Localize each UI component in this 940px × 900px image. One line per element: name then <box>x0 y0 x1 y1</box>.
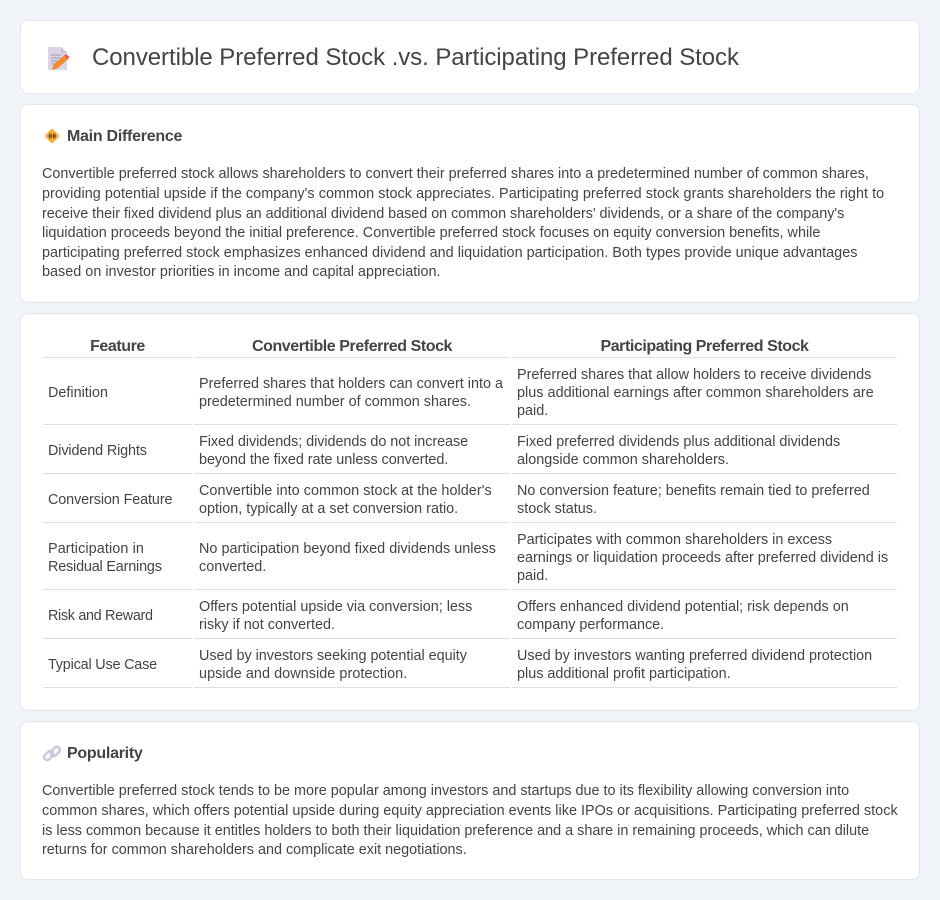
row: participation in residual earnings: earnings or liquidation proceeds after preferred dividend is <box>517 550 888 566</box>
row: conversion feature: No conversion feature; benefits remain tied to preferred <box>517 483 870 499</box>
row: dividend rights: alongside common shareholders. <box>517 452 729 468</box>
row: conversion feature: stock status. <box>517 501 597 517</box>
row: typical use case: plus additional profit participation. <box>517 666 731 682</box>
text block: popularity: common shares, which offers potential upside during equity appreciation events like IPOs or acquisitions. Participating preferred stock <box>42 803 898 819</box>
table header: participating preferred stock: Participating Preferred Stock <box>600 338 809 355</box>
text block: main difference: based on investor priorities in income and capital appreciation. <box>42 264 441 280</box>
row: conversion feature: Convertible into common stock at the holder's <box>199 483 492 499</box>
icon: document with pencil <box>48 47 70 70</box>
row: definition: Preferred shares that allow holders to receive dividends <box>517 367 871 383</box>
text block: popularity: returns for common shareholders and complicate exit negotiations. <box>42 842 467 858</box>
row: participation in residual earnings: No participation beyond fixed dividends unless <box>199 541 496 557</box>
row: dividend rights <box>48 434 840 468</box>
row: participation in residual earnings: Participation in <box>48 541 144 557</box>
text block: popularity: Convertible preferred stock tends to be more popular among investors and startups due to its flexibility allowing conversion into <box>42 783 849 799</box>
row: definition: paid. <box>517 403 548 419</box>
row: risk and reward: risky if not converted. <box>199 617 335 633</box>
row: dividend rights: Fixed preferred dividends plus additional dividends <box>517 434 840 450</box>
title: Convertible Preferred Stock .vs. Participating Preferred Stock <box>92 44 739 71</box>
row: definition <box>48 367 874 419</box>
text block: main difference: liquidation proceeds beyond the initial preference. Convertible preferred stock focuses on equity conversion benefits, while <box>42 225 820 241</box>
row: definition: Preferred shares that holders can convert into a <box>199 376 503 392</box>
icon: chain link <box>43 746 61 762</box>
panel: main difference <box>20 104 920 303</box>
row: typical use case: Used by investors seeking potential equity <box>199 648 467 664</box>
text block: main difference: receive their fixed dividend plus an additional dividend based on common shareholders' dividends, or a share of the company's <box>42 206 844 222</box>
row: conversion feature <box>48 483 870 517</box>
table header: feature: Feature <box>90 338 145 355</box>
heading: popularity: Popularity <box>67 745 143 762</box>
row: participation in residual earnings: Residual Earnings <box>48 559 162 575</box>
row: participation in residual earnings: paid. <box>517 568 548 584</box>
text block: popularity: is less common because it entitles holders to both their liquidation preference and a share in remaining proceeds, which can dilute <box>42 823 869 839</box>
table header: convertible preferred stock: Convertible Preferred Stock <box>252 338 452 355</box>
panel: comparison table <box>20 313 920 711</box>
row: conversion feature: option, typically at a set conversion ratio. <box>199 501 458 517</box>
row: risk and reward: Offers potential upside via conversion; less <box>199 599 472 615</box>
heading: main difference: Main Difference <box>67 128 182 145</box>
row: risk and reward: company performance. <box>517 617 664 633</box>
row: risk and reward: Risk and Reward <box>48 608 153 624</box>
row: dividend rights: Fixed dividends; dividends do not increase <box>199 434 468 450</box>
text block: main difference: providing potential upside if the company's common stock appreciates. Participating preferred stock grants shareholders the right to <box>42 186 884 202</box>
row: participation in residual earnings: converted. <box>199 559 266 575</box>
text block: popularity <box>42 783 898 858</box>
row: definition: Definition <box>48 385 108 401</box>
row: typical use case: upside and downside protection. <box>199 666 407 682</box>
panel: popularity <box>20 721 920 880</box>
row: typical use case: Typical Use Case <box>48 657 157 673</box>
row: typical use case: Used by investors wanting preferred dividend protection <box>517 648 872 664</box>
row: conversion feature: Conversion Feature <box>48 492 172 508</box>
row: participation in residual earnings <box>48 532 888 584</box>
row: risk and reward <box>48 599 849 633</box>
row: typical use case <box>48 648 872 682</box>
row: risk and reward: Offers enhanced dividend potential; risk depends on <box>517 599 849 615</box>
row: dividend rights: Dividend Rights <box>48 443 147 459</box>
panel: title card <box>20 20 920 94</box>
row: participation in residual earnings: Participates with common shareholders in excess <box>517 532 832 548</box>
row: definition: predetermined number of common shares. <box>199 394 471 410</box>
text block: main difference <box>42 166 884 280</box>
text block: main difference: participating preferred stock emphasizes enhanced dividend and liquidation participation. Both types provide unique advantages <box>42 245 857 261</box>
icon: warning diamond <box>44 128 60 144</box>
row: dividend rights: beyond the fixed rate unless converted. <box>199 452 448 468</box>
row: definition: plus additional earnings after common shareholders are <box>517 385 874 401</box>
text block: main difference: Convertible preferred stock allows shareholders to convert their preferred shares into a predetermined number of common shares, <box>42 166 869 182</box>
